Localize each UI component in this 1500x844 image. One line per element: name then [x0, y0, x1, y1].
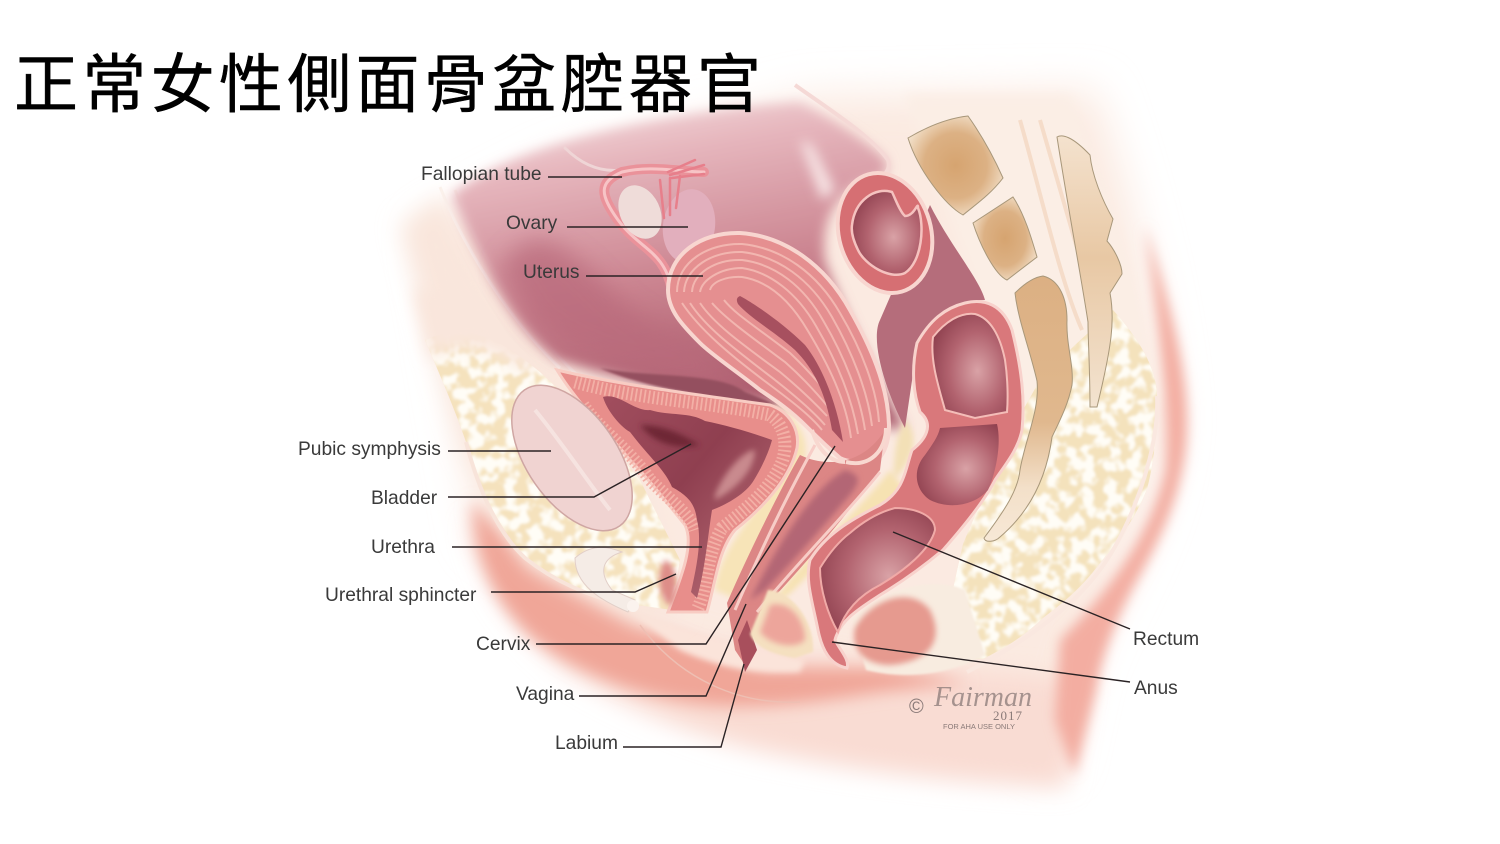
anatomy labels — [298, 164, 1199, 754]
anatomy labels: Urethra — [371, 537, 435, 558]
skin: perineal pale zone — [632, 612, 805, 673]
uterine cavity — [737, 296, 843, 442]
artist signature — [909, 682, 1032, 731]
anatomy labels: Labium — [555, 733, 618, 754]
fallopian tube — [565, 148, 704, 290]
artist signature: FOR AHA USE ONLY — [943, 722, 1015, 731]
rectum — [808, 301, 1023, 668]
vagina — [727, 428, 886, 672]
artist signature: 2017 — [993, 708, 1023, 723]
pale tissue between organs — [715, 405, 913, 600]
leader lines — [448, 177, 1130, 747]
label target: fallopian tube and ovary — [565, 148, 720, 290]
skin: pale lower pink — [470, 520, 1085, 788]
anatomy labels: Anus — [1134, 678, 1178, 699]
bladder and urethra — [557, 370, 798, 612]
body silhouette — [425, 90, 1187, 788]
back fat tissue — [905, 95, 1157, 672]
title: 正常女性側面骨盆腔器官 — [14, 49, 765, 121]
anatomy labels: Bladder — [371, 488, 438, 509]
sacrum and coccyx bones — [908, 116, 1122, 541]
anatomy labels: Ovary — [506, 213, 558, 234]
panel: abdominal cavity — [452, 85, 905, 430]
anatomy labels: Vagina — [516, 684, 575, 705]
ovary — [658, 186, 720, 266]
skin: salmon band — [472, 500, 970, 706]
label target: upper colon cross-section — [824, 162, 985, 428]
rectum lumen lower — [820, 508, 935, 632]
rectum lumen upper — [932, 314, 1008, 418]
anatomy labels: Uterus — [523, 262, 580, 283]
anatomy labels: Fallopian tube — [421, 164, 542, 185]
uterus — [668, 233, 889, 462]
perineal muscle and anal sphincter — [640, 584, 985, 702]
anatomy labels: Cervix — [476, 634, 531, 655]
front abdominal wall and fat — [400, 187, 680, 625]
anatomy labels: Pubic symphysis — [298, 439, 441, 460]
rectum lumen middle — [917, 424, 999, 505]
bladder lumen — [603, 396, 772, 598]
anatomy labels: Rectum — [1133, 629, 1199, 650]
artist signature: © — [909, 696, 924, 718]
pubic symphysis — [488, 364, 656, 552]
urethral sphincter tissue — [575, 547, 676, 612]
artist signature: Fairman — [933, 682, 1032, 713]
skin: back band — [1055, 225, 1187, 775]
anatomy labels: Urethral sphincter — [325, 585, 477, 606]
fat fade top — [415, 288, 545, 370]
